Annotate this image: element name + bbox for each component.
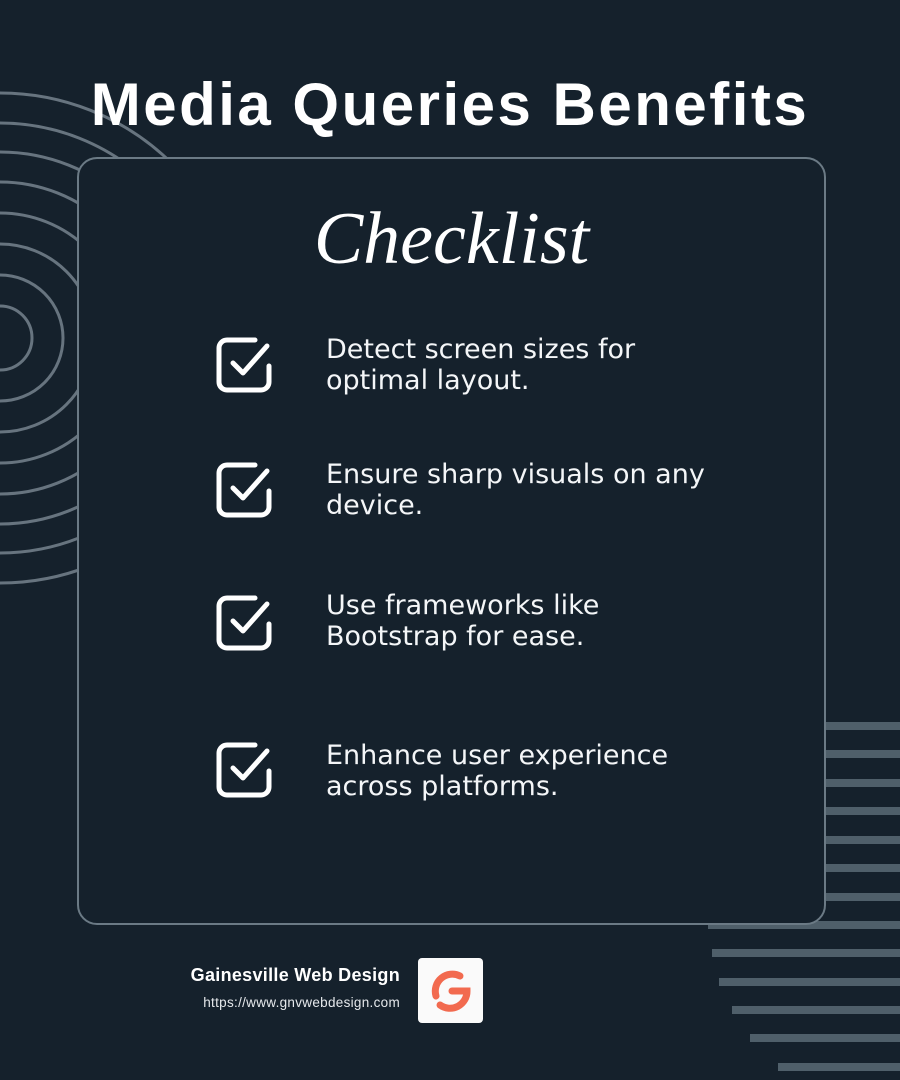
- icon: checkbox: [216, 338, 272, 392]
- text: device.: [326, 490, 423, 521]
- text: Detect screen sizes for: [326, 334, 635, 365]
- text: Use frameworks like: [326, 590, 599, 621]
- icon: checkbox: [216, 742, 272, 798]
- text: [326, 459, 705, 521]
- text: Ensure sharp visuals on any: [326, 459, 705, 490]
- icon: checkbox: [216, 462, 272, 518]
- text: Bootstrap for ease.: [326, 621, 584, 652]
- text: Enhance user experience: [326, 740, 668, 771]
- footer brand: [191, 965, 400, 1010]
- text: optimal layout.: [326, 365, 530, 396]
- logo: [418, 958, 483, 1023]
- item 2: [216, 459, 705, 521]
- text: across platforms.: [326, 771, 559, 802]
- brand name: Gainesville Web Design: [191, 965, 400, 985]
- text: [326, 334, 636, 396]
- text: [326, 740, 668, 802]
- item 1: [216, 334, 636, 396]
- text: [326, 590, 599, 652]
- url: https://www.gnvwebdesign.com: [203, 995, 400, 1010]
- item 3: [216, 590, 599, 652]
- icon: checkbox: [216, 596, 272, 650]
- item 4: [216, 740, 668, 802]
- heading: Checklist: Checklist: [314, 198, 589, 280]
- title: Media Queries Benefits: [91, 71, 809, 138]
- panel: checklist: [77, 157, 826, 925]
